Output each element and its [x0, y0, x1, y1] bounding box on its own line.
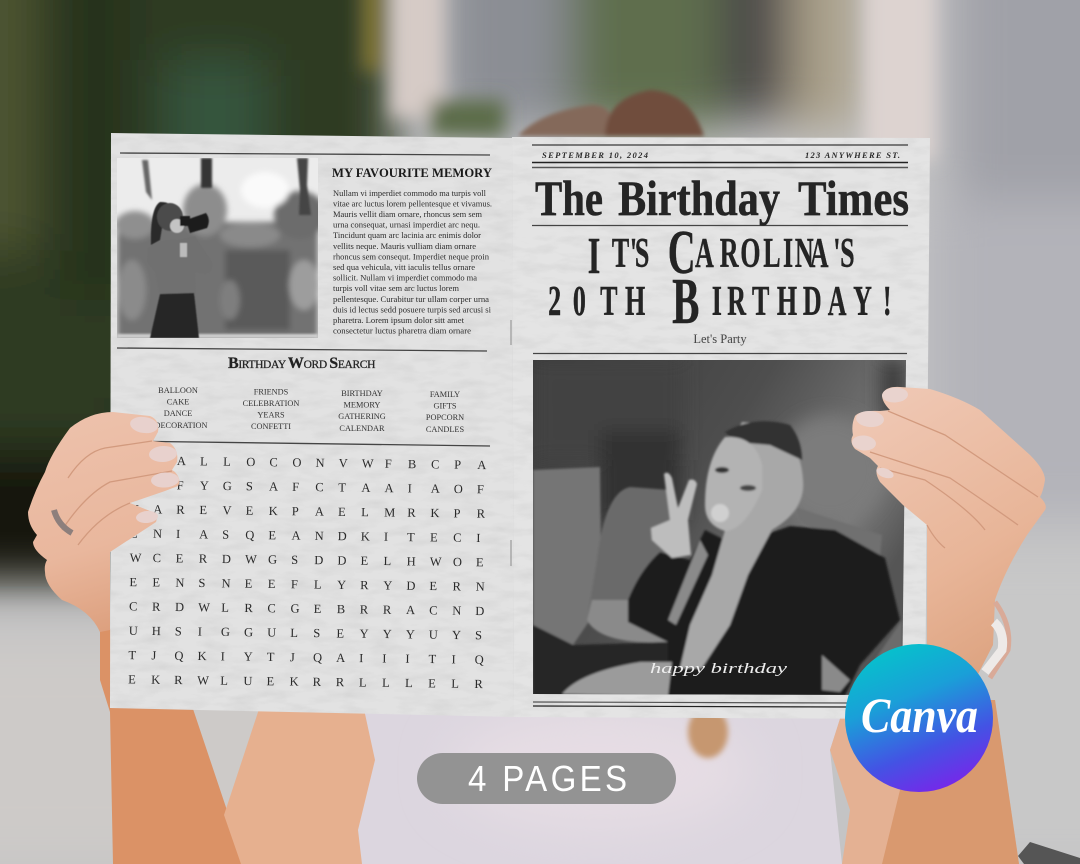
word list column 3: BIRTHDAY: [341, 389, 383, 398]
address line: 123 ANYWHERE ST.: [805, 150, 900, 160]
hair: [151, 202, 169, 245]
badge: canva logo: [845, 644, 993, 792]
finger creases: [62, 441, 172, 545]
word list column 3: [338, 389, 386, 433]
word list column 2: YEARS: [257, 410, 285, 420]
word list column 1: BALLOON: [158, 386, 198, 395]
text block: memory article: pharetra. Lorem ipsum dolor sitt amet: [333, 316, 465, 325]
headline line 1: C: [668, 219, 695, 287]
headline line 2: B: [672, 264, 699, 337]
page fold marks: [510, 320, 512, 566]
white t-shirt: [355, 700, 846, 864]
subheading: let's party: Let's Party: [693, 332, 747, 346]
word list column 2: FRIENDS: [254, 388, 289, 396]
right hand: [851, 387, 1046, 680]
text block: memory article: pellentesque. Curabitur tur ullam corper urna: [333, 295, 489, 304]
text block: memory article: Tincidunt quam arc lacinia arc enimis dolor: [333, 231, 481, 240]
text block: memory article: sollicit. Nullam vi imperdiet commodo ma: [333, 274, 477, 283]
badge: canva logo: Canva: [861, 687, 978, 743]
fingernails: [129, 415, 179, 524]
word list column 4: CANDLES: [426, 425, 465, 434]
cushion middle: [592, 486, 671, 600]
left arm: [100, 620, 375, 864]
photo: woman making peace sign: [533, 360, 906, 696]
text block: memory article: vitae arc luctus lorem pellentesque et vivamus.: [333, 200, 492, 208]
right page rules: [532, 145, 908, 354]
text block: memory article: consectetur luctus pharetra diam ornare: [333, 326, 471, 336]
left hand: [28, 412, 179, 632]
heading: my favourite memory: MY FAVOURITE MEMORY: [332, 166, 492, 180]
headline line 2: 20TH: [548, 278, 645, 325]
word search grid: TJQKIYTJQAIIITIQ: [128, 648, 484, 667]
date line: SEPTEMBER 10, 2024: [542, 150, 648, 160]
word list column 3: CALENDAR: [339, 424, 385, 433]
word search grid: CRDWLRCGEBRRACND: [129, 599, 484, 618]
text block: memory article: duis id lectus sedd posuere turpis sed arcusi si: [333, 305, 492, 314]
word list column 4: GIFTS: [433, 402, 457, 410]
masthead title: [535, 170, 909, 226]
word list column 3: GATHERING: [338, 412, 386, 421]
sweater: [161, 293, 194, 294]
panel: left page: [110, 133, 514, 717]
face and hand: [170, 219, 184, 233]
light cloth lower right: [822, 655, 850, 692]
lower right fade: [850, 620, 902, 696]
headline line 1: T'S: [612, 230, 649, 277]
badge: 4 pages: 4 PAGES: [468, 760, 627, 799]
camera: [180, 216, 190, 226]
badge: 4 pages: [417, 753, 676, 804]
headline line 1: I: [588, 227, 600, 285]
masthead title: Times: [798, 170, 909, 226]
text block: memory article: Mauris vellit diam ornare, rhoncus sem sem: [333, 210, 483, 219]
word search grid: WCERDWGSDDELHWOE: [130, 551, 484, 569]
text block: memory article: sed qua vehicula, vitt iaculis tellus ornare: [333, 263, 475, 272]
text block: memory article: [333, 189, 492, 336]
panel: right page: [512, 137, 930, 719]
word list column 4: FAMILY: [430, 390, 460, 399]
word search grid: ALLOCONVWFBCPA: [177, 454, 486, 472]
finger creases: [870, 411, 1038, 548]
frill: [805, 512, 882, 556]
hair bun above the paper: [518, 90, 704, 136]
word search grid: UHSIGGULSEYYYUYS: [129, 624, 482, 642]
text block: memory article: rhoncus sem consequt. Imperdiet neque proin: [333, 252, 490, 261]
dark railing corner: [1018, 842, 1080, 864]
word list column 1: [154, 386, 208, 430]
word list column 2: CONFETTI: [251, 422, 291, 431]
word search grid: EENSNEEFLYRYDERN: [129, 575, 485, 594]
masthead title: Birthday: [618, 170, 780, 226]
face: [705, 437, 762, 531]
word list column 4: POPCORN: [426, 413, 464, 422]
skirt: [150, 293, 199, 338]
ring: [54, 510, 72, 533]
word search grid: [128, 453, 486, 691]
left page rules: [117, 153, 490, 446]
text block: memory article: turpis voll vitae sem arc luctus lorem: [333, 284, 460, 293]
word list column 1: DANCE: [164, 409, 192, 418]
left hair strand: [668, 540, 708, 625]
photo: girl with camera: [115, 158, 326, 340]
newspaper spread: [110, 133, 930, 719]
wrist watch: [985, 602, 1009, 678]
hair: [680, 422, 803, 668]
leg: [562, 662, 672, 696]
fingernails: [851, 387, 908, 480]
text block: memory article: Nullam vi imperdiet commodo ma turpis voll: [333, 189, 487, 198]
word search grid: FYGSAFCTAAIAOF: [177, 478, 484, 496]
word search grid: EKRWLUEKRRLLLELR: [128, 672, 483, 691]
cushion left: [533, 467, 601, 645]
word list column 1: DECORATION: [154, 421, 208, 430]
peace hand: [651, 473, 697, 558]
word list column 4: [426, 390, 465, 434]
word search grid: ENIASQEANDKITECI: [130, 526, 481, 545]
text block: memory article: vellits neque. Mauris vulliam diam ornare: [333, 242, 476, 251]
right arm: [830, 700, 1019, 864]
word list column 3: MEMORY: [344, 400, 380, 410]
headline line 2: IRTHDAY!: [712, 278, 892, 325]
dark floor: [533, 625, 670, 696]
caption: happy birthday: happy birthday: [650, 661, 787, 677]
bottom rules right page: [533, 702, 850, 707]
word list column 1: CAKE: [167, 398, 189, 406]
word search grid: KAREVEKPAELMRKPR: [130, 502, 486, 521]
heading: birthday word search: BIRTHDAY WORD SEARCH: [228, 355, 376, 372]
word list column 2: CELEBRATION: [243, 399, 299, 408]
headline line 1: AROLINA'S: [695, 230, 855, 277]
text block: memory article: urna consequat, urnasi imperdiet arc nequ.: [333, 221, 480, 230]
word list column 2: [243, 388, 299, 431]
masthead title: The: [535, 170, 603, 226]
sweater: [628, 526, 900, 696]
